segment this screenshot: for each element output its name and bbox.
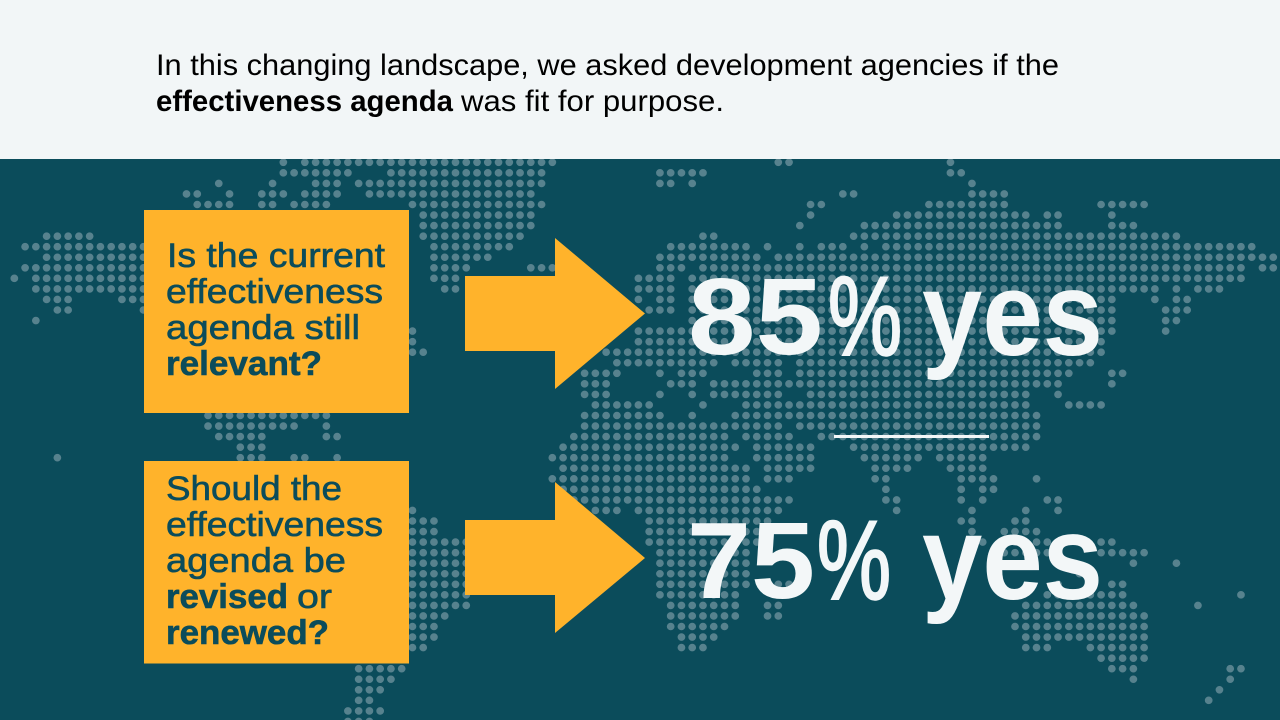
question box 2 bbox=[144, 461, 409, 664]
panel: top intro band bbox=[0, 0, 1280, 159]
question box 1: agenda still bbox=[166, 309, 360, 347]
result: 85% yes: 85 bbox=[688, 256, 823, 378]
result: 75% yes bbox=[687, 491, 1103, 625]
result: 85% yes: yes bbox=[922, 247, 1103, 381]
result: 75% yes: 75 bbox=[687, 500, 815, 622]
intro text: In this changing landscape, we asked development agencies if the bbox=[156, 49, 1059, 82]
question box 1: relevant? bbox=[166, 345, 322, 383]
intro text bbox=[156, 49, 1059, 118]
question box 1: effectiveness bbox=[166, 273, 383, 311]
question box 2: agenda be bbox=[166, 542, 346, 580]
question box 1: Is the current bbox=[167, 237, 386, 275]
result: 85% yes bbox=[688, 247, 1103, 381]
question box 2: or bbox=[297, 578, 332, 616]
result: 75% yes: % bbox=[817, 498, 891, 623]
dotted world map bbox=[14, 162, 1274, 720]
question box 2: effectiveness bbox=[166, 506, 383, 544]
result: 75% yes: yes bbox=[922, 491, 1103, 625]
result: 85% yes: % bbox=[828, 254, 902, 379]
intro text: was fit for purpose. bbox=[460, 85, 724, 118]
question box 2: Should the bbox=[166, 470, 342, 508]
divider line bbox=[834, 435, 989, 438]
panel: dark teal background bbox=[0, 159, 1280, 720]
question box 2: renewed? bbox=[166, 614, 329, 652]
question box 2: revised bbox=[166, 578, 288, 616]
arrow 1 bbox=[465, 238, 645, 389]
question box 1 bbox=[144, 210, 409, 413]
arrow 2 bbox=[465, 482, 645, 633]
intro text: effectiveness agenda bbox=[156, 85, 453, 118]
